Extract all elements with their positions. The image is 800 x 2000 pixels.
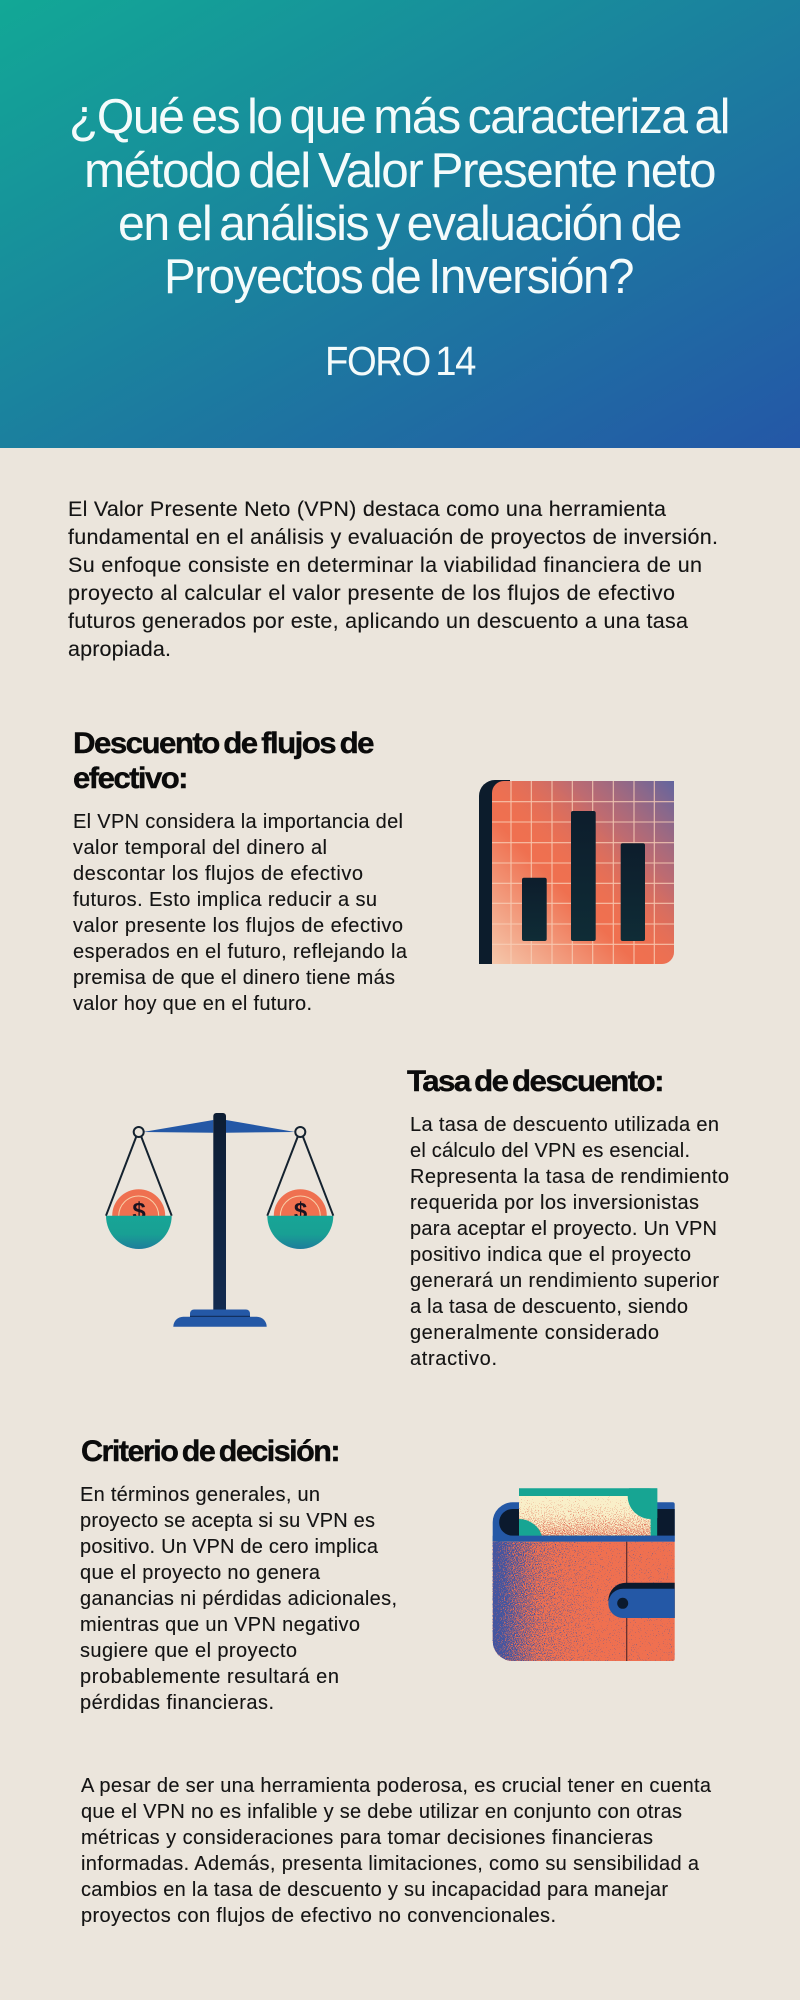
text: descuento de flujos: valor presente los flujos de efectivo (73, 915, 403, 937)
subtitle: FORO 14 (325, 338, 476, 384)
text: descuento de flujos: premisa de que el dinero tiene más (73, 967, 395, 989)
right pan: $ (294, 1198, 308, 1225)
text: descuento de flujos: valor temporal del dinero al (73, 837, 327, 859)
text: criterio de decision (80, 1484, 397, 1714)
intro paragraph: futuros generados por este, aplicando un descuento a una tasa (68, 609, 688, 633)
text: tasa de descuento: generará un rendimiento superior (410, 1270, 719, 1292)
text: tasa de descuento: La tasa de descuento utilizada en (410, 1114, 719, 1136)
left pan (106, 1127, 172, 1249)
title (69, 90, 729, 304)
text: criterio de decision: mientras que un VPN negativo (80, 1614, 360, 1636)
text: descuento de flujos: descontar los flujos de efectivo (73, 863, 363, 885)
text: descuento de flujos: El VPN considera la importancia del (73, 811, 403, 833)
title: ¿Qué es lo que más caracteriza al (69, 90, 729, 144)
closing paragraph: cambios en la tasa de descuento y su incapacidad para manejar (81, 1879, 668, 1901)
closing paragraph: proyectos con flujos de efectivo no convencionales. (81, 1905, 556, 1927)
intro paragraph: El Valor Presente Neto (VPN) destaca como una herramienta (68, 497, 666, 521)
closing paragraph: métricas y consideraciones para tomar decisiones financieras (81, 1827, 653, 1849)
text: tasa de descuento: requerida por los inversionistas (410, 1192, 699, 1214)
panel: tasa de descuento (106, 1065, 729, 1370)
closing paragraph (81, 1775, 712, 1927)
panel: criterio de decision (80, 1435, 675, 1714)
text: tasa de descuento: el cálculo del VPN es esencial. (410, 1140, 690, 1162)
title: en el análisis y evaluación de (118, 197, 681, 251)
text: criterio de decision: sugiere que el proyecto (80, 1640, 297, 1662)
text: tasa de descuento: atractivo. (410, 1348, 497, 1370)
text: descuento de flujos: valor hoy que en el futuro. (73, 993, 312, 1015)
intro paragraph: proyecto al calcular el valor presente de los flujos de efectivo (68, 581, 675, 605)
heading: descuento de flujos: Descuento de flujos de (73, 727, 374, 760)
icon: bar chart (479, 780, 674, 964)
heading: criterio de decision: Criterio de decisión: (81, 1435, 339, 1468)
closing paragraph: informadas. Además, presenta limitaciones, como su sensibilidad a (81, 1853, 700, 1875)
text: criterio de decision: En términos generales, un (80, 1484, 320, 1506)
heading: descuento de flujos: efectivo: (73, 762, 187, 795)
text: criterio de decision: probablemente resultará en (80, 1666, 339, 1688)
intro paragraph: Su enfoque consiste en determinar la viabilidad financiera de un (68, 553, 702, 577)
text: criterio de decision: positivo. Un VPN de cero implica (80, 1536, 379, 1558)
text: descuento de flujos (73, 811, 408, 1015)
closing paragraph: que el VPN no es infalible y se debe utilizar en conjunto con otras (81, 1801, 682, 1823)
icon: wallet (493, 1473, 675, 1661)
text: descuento de flujos: futuros. Esto implica reducir a su (73, 889, 377, 911)
text: tasa de descuento: a la tasa de descuento, siendo (410, 1296, 688, 1318)
intro paragraph: apropiada. (68, 637, 171, 661)
right pan (267, 1127, 333, 1249)
text: descuento de flujos: esperados en el futuro, reflejando la (73, 941, 408, 963)
text: tasa de descuento: positivo indica que el proyecto (410, 1244, 691, 1266)
text: criterio de decision: ganancias ni pérdidas adicionales, (80, 1588, 397, 1610)
text: tasa de descuento (410, 1114, 729, 1370)
heading: descuento de flujos (73, 727, 374, 795)
heading: tasa de descuento: Tasa de descuento: (407, 1065, 663, 1098)
icon: balance scale (106, 1113, 333, 1327)
text: tasa de descuento: generalmente considerado (410, 1322, 659, 1344)
closing paragraph: A pesar de ser una herramienta poderosa, es crucial tener en cuenta (81, 1775, 712, 1797)
text: tasa de descuento: Representa la tasa de rendimiento (410, 1166, 729, 1188)
panel: descuento de flujos (73, 727, 674, 1015)
intro paragraph: fundamental en el análisis y evaluación de proyectos de inversión. (68, 525, 718, 549)
text: criterio de decision: que el proyecto no genera (80, 1562, 321, 1584)
title: Proyectos de Inversión? (164, 250, 633, 304)
text: criterio de decision: proyecto se acepta si su VPN es (80, 1510, 375, 1532)
header banner (0, 0, 800, 448)
intro paragraph (68, 497, 718, 661)
text: criterio de decision: pérdidas financieras. (80, 1692, 274, 1714)
title: método del Valor Presente neto (84, 144, 715, 198)
left pan: $ (132, 1198, 146, 1225)
text: tasa de descuento: para aceptar el proyecto. Un VPN (410, 1218, 717, 1240)
